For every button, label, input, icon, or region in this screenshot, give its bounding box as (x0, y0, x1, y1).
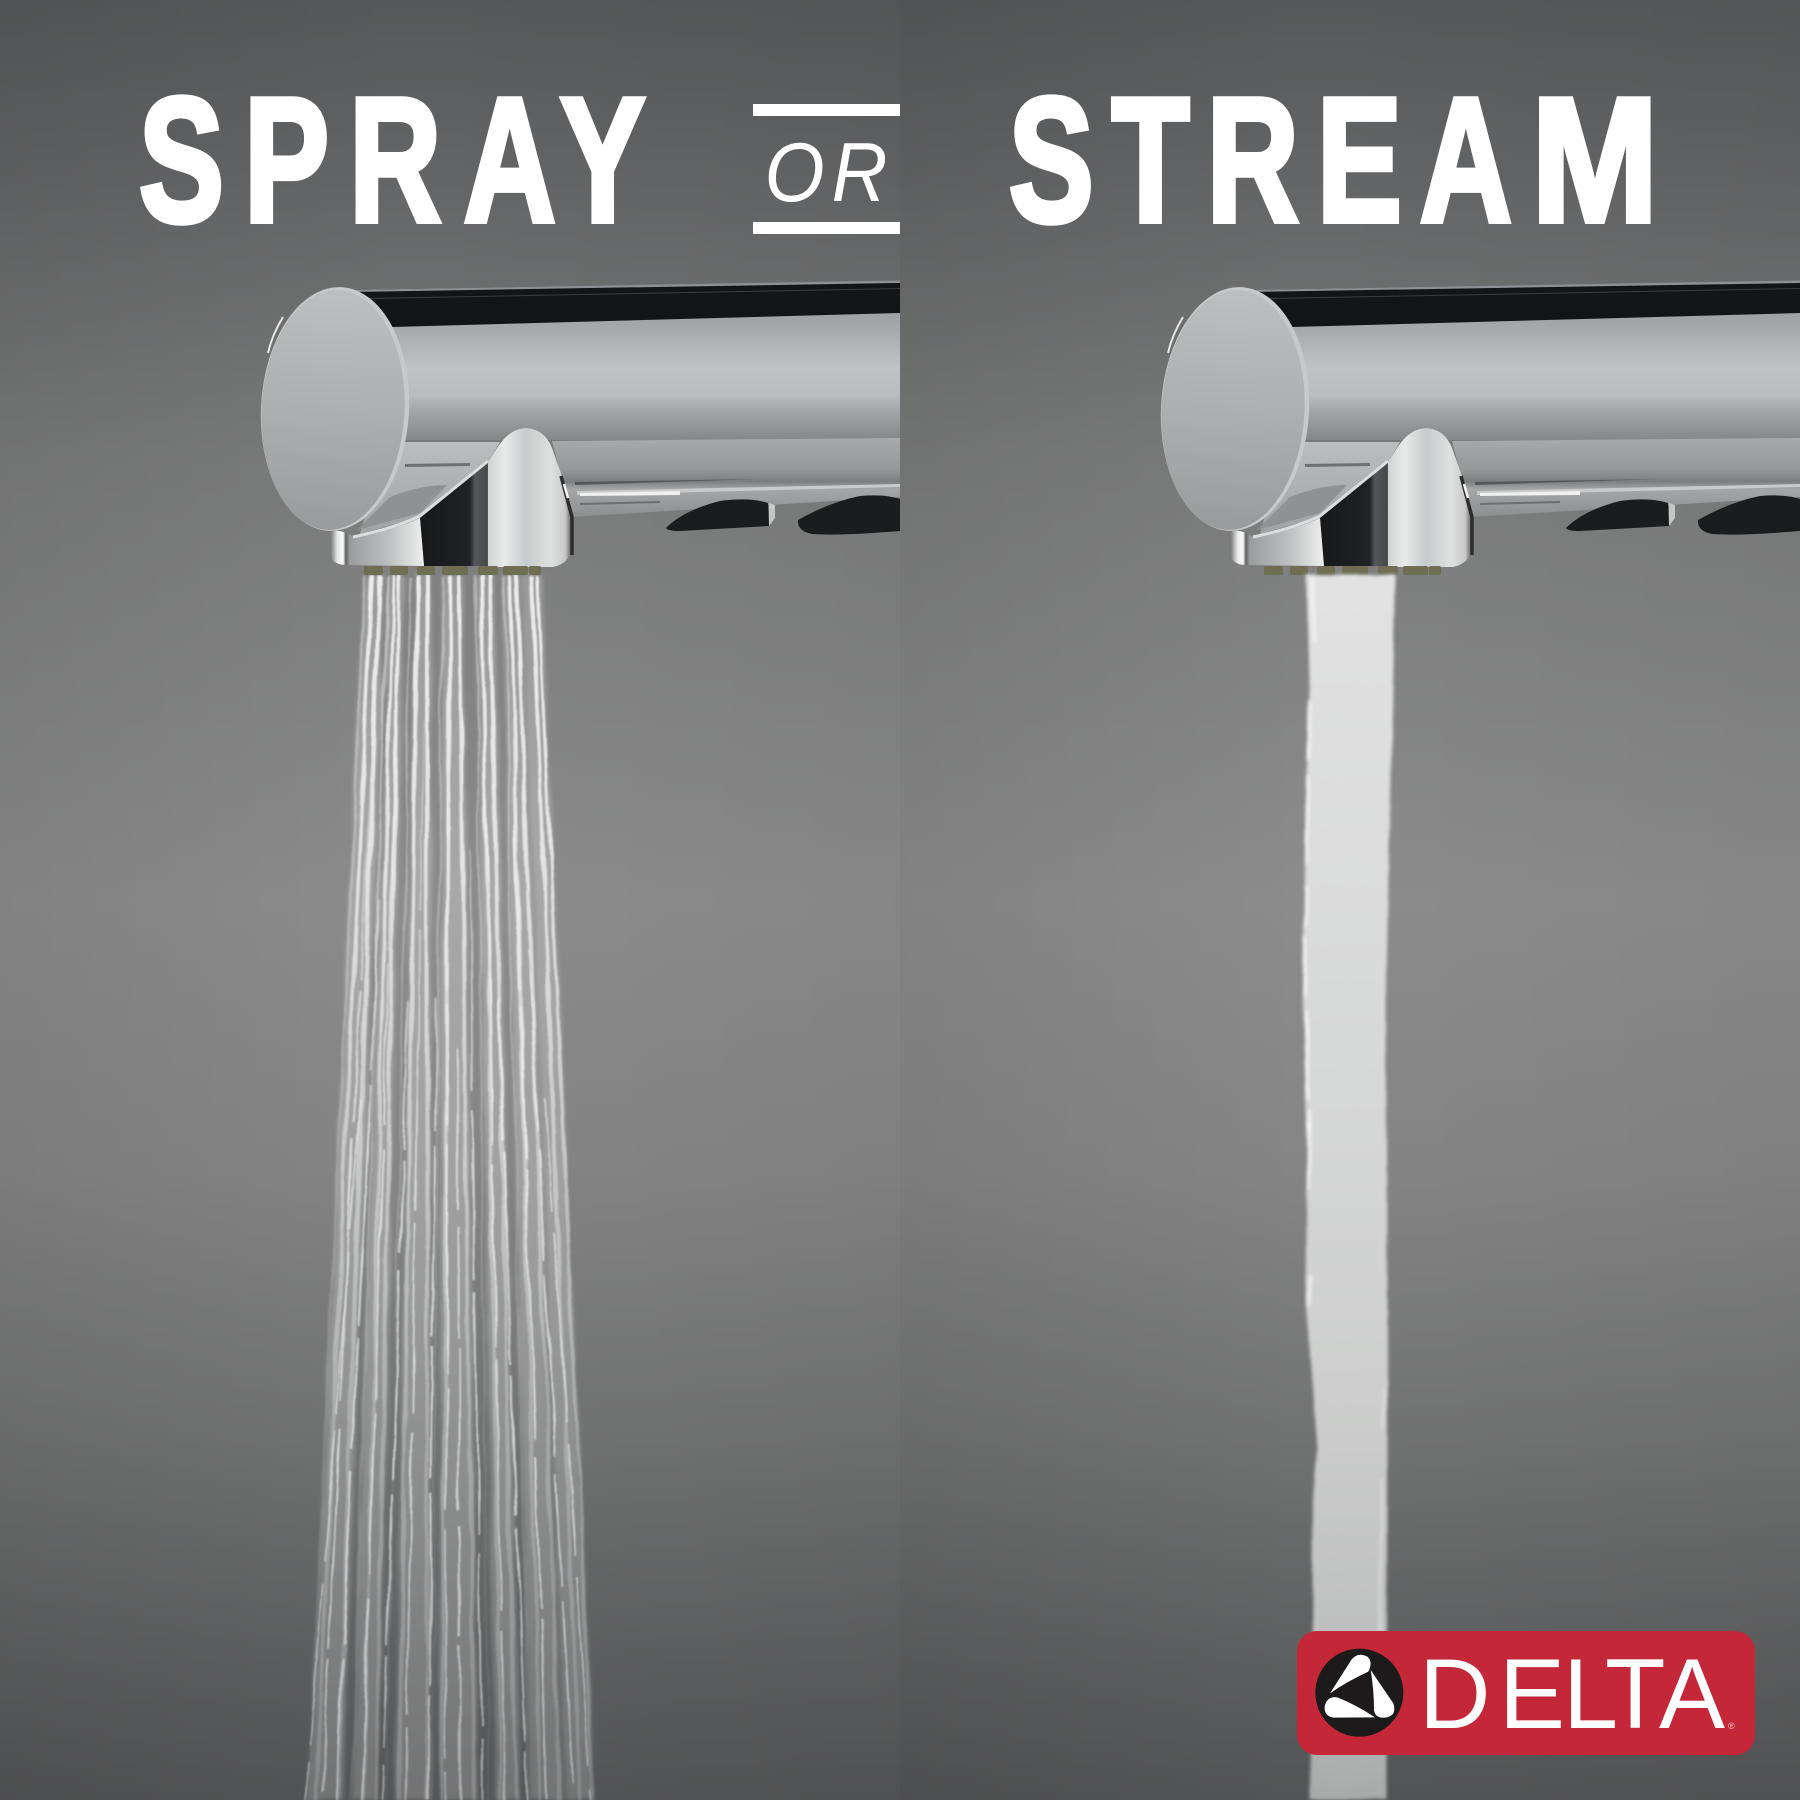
title: spray: SPRAY (139, 60, 645, 259)
photo: water spray (305, 575, 594, 1800)
title: stream: STREA (1009, 60, 1512, 259)
title: or with rules (753, 104, 900, 234)
logo: Delta badge (1297, 1631, 1755, 1755)
registered mark: ® (1728, 1721, 1735, 1731)
photo: water stream (1303, 575, 1395, 1800)
photo: right faucet head (1155, 280, 1800, 575)
panel: spray background (0, 0, 900, 1800)
wordmark: DELTA: DELTA (1419, 1638, 1725, 1749)
title: stream: M (1531, 60, 1658, 259)
panel: stream background (900, 0, 1800, 1800)
title: or with rules: OR (765, 126, 887, 220)
photo: left faucet head (255, 280, 900, 575)
icon: Delta triangle mark (1315, 1649, 1403, 1737)
